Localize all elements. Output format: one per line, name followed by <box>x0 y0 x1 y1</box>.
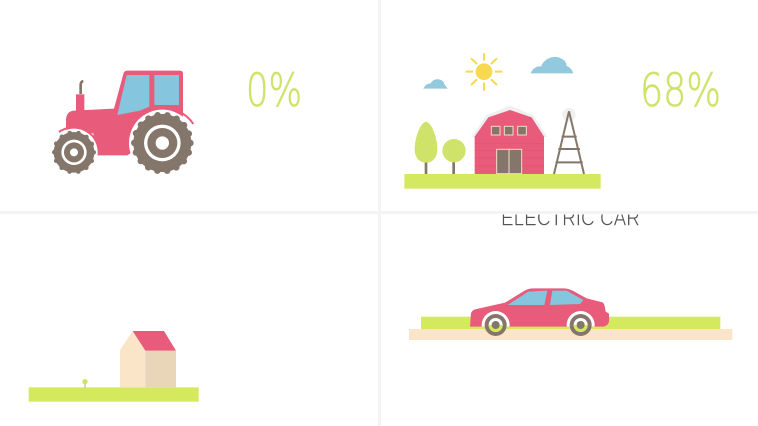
rear wheel <box>485 314 507 336</box>
illustration: car on road <box>409 288 732 340</box>
ground <box>29 387 199 402</box>
icon: tractor <box>50 71 196 176</box>
illustration: farm scene <box>404 53 601 189</box>
wheel arches <box>482 311 595 327</box>
panel: electric car <box>409 204 732 340</box>
icon: round tree <box>442 139 466 174</box>
icon: windmill tower <box>554 108 584 174</box>
icon: house <box>120 331 176 387</box>
heading: ELECTRIC CAR <box>501 204 640 230</box>
panel: tractor <box>50 64 302 176</box>
icon: barn <box>472 106 547 174</box>
stat: 68%: 68% <box>640 64 721 117</box>
front wheel <box>570 314 592 336</box>
house roof <box>133 331 176 351</box>
tractor exhaust base <box>76 94 84 111</box>
barn windows <box>491 126 526 135</box>
rear wheel <box>129 110 196 176</box>
house side wall <box>145 351 176 387</box>
tractor body <box>66 71 183 155</box>
barn door <box>497 149 522 174</box>
panel: house <box>29 331 199 402</box>
barn walls <box>475 110 544 174</box>
tractor exhaust pipe <box>81 81 83 94</box>
icon: small cloud <box>423 79 448 89</box>
barn roof <box>472 106 547 137</box>
icon: large cloud <box>531 57 573 73</box>
rear fender <box>130 108 193 133</box>
ground <box>404 174 601 189</box>
tractor left window <box>117 75 149 115</box>
icon: sun <box>466 53 502 91</box>
icon: tall tree <box>415 122 437 174</box>
icon: sapling <box>82 379 88 388</box>
road strip <box>409 329 732 340</box>
house front wall <box>120 331 145 387</box>
front wheel <box>50 129 98 176</box>
tractor right window <box>154 75 179 105</box>
panel: farm <box>404 53 721 189</box>
front fender <box>59 127 99 150</box>
car front window <box>508 291 547 305</box>
grass strip <box>421 317 720 331</box>
car body <box>470 288 609 327</box>
barn siding <box>475 143 544 166</box>
car rear window <box>550 291 583 305</box>
stat: 0%: 0% <box>246 64 302 117</box>
